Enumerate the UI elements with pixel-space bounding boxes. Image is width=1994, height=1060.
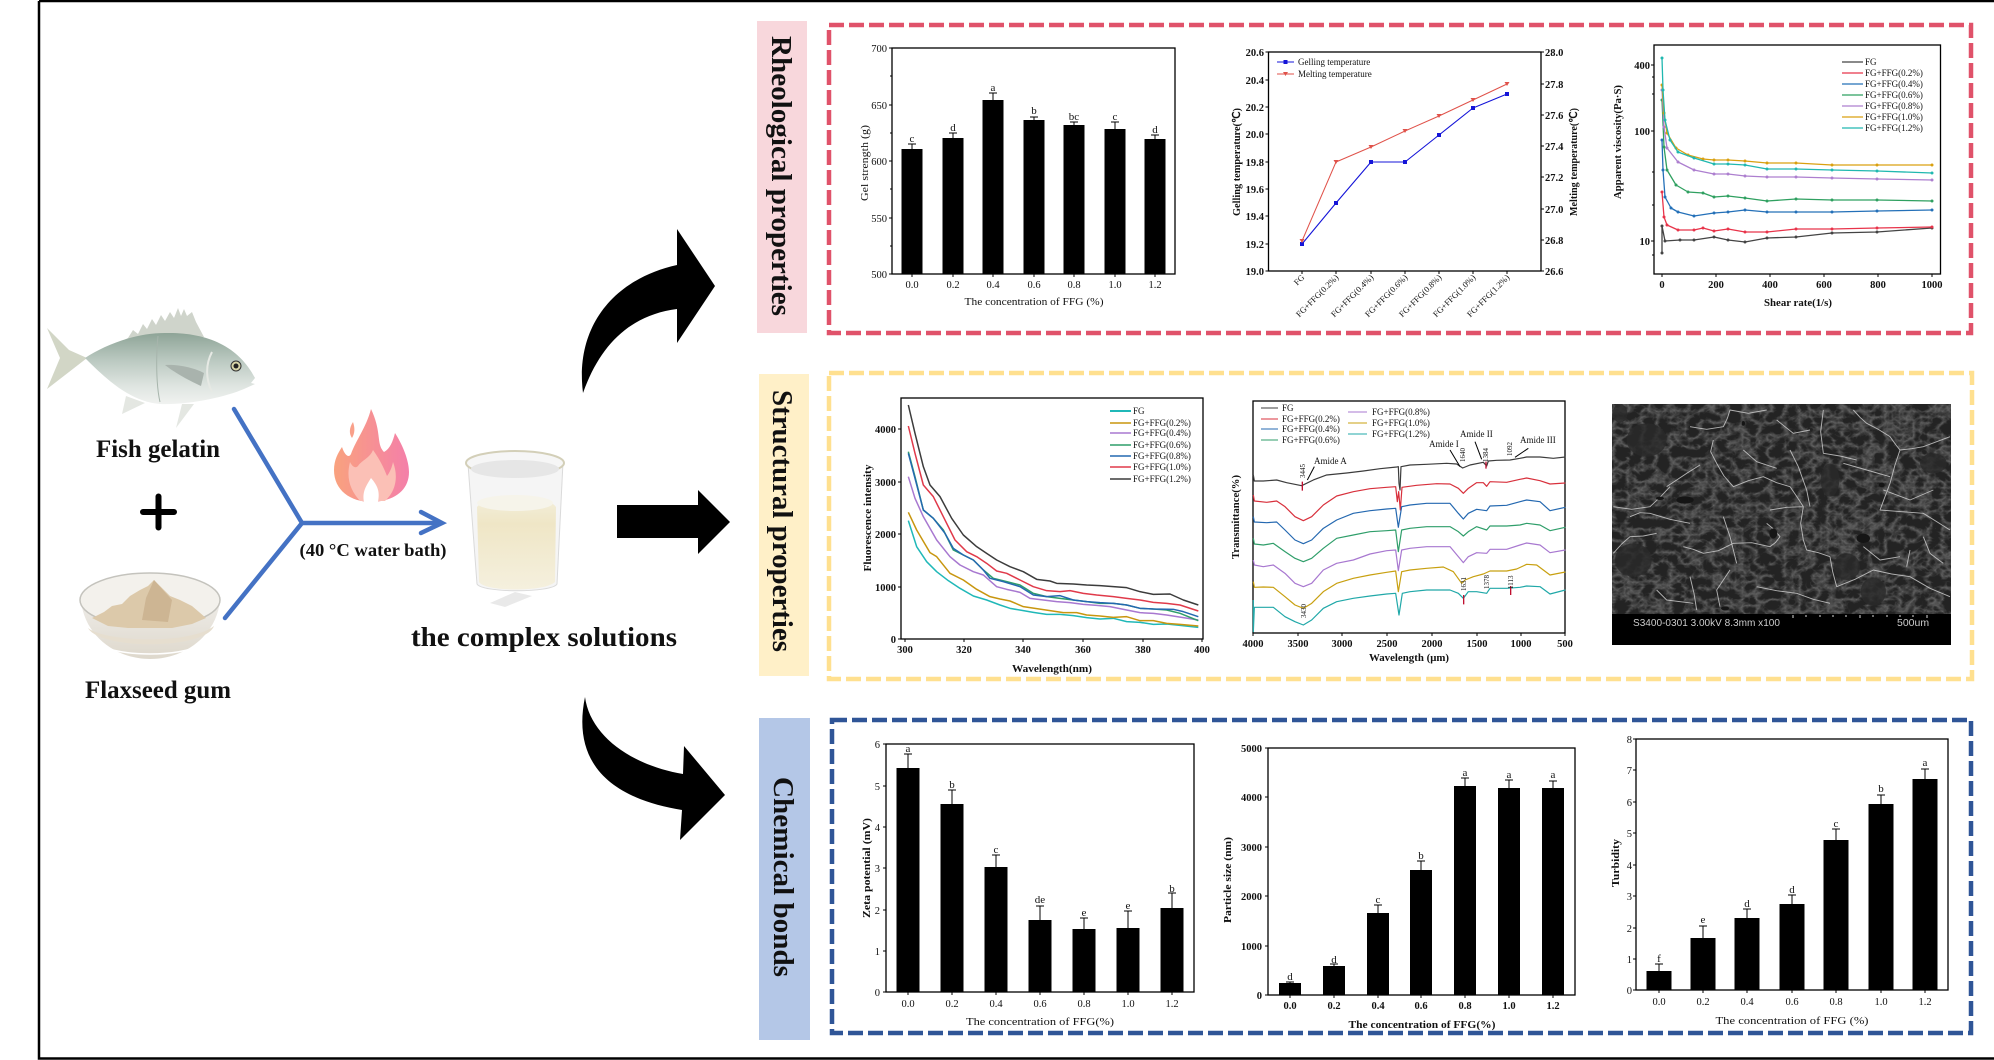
- line chart: FTIR transmittance: 1113: [1507, 575, 1515, 589]
- bar chart: gel strength: b: [1031, 105, 1037, 117]
- line chart: FTIR transmittance: 3445: [1299, 464, 1307, 478]
- line chart: fluorescence intensity: FG+FFG(0.4%): [1133, 428, 1191, 438]
- line chart: gelling and melting temperature: 20.2: [1246, 103, 1264, 114]
- line chart: FTIR transmittance: FG+FFG(1.0%): [1372, 418, 1430, 428]
- icon: plus: [143, 496, 174, 528]
- line chart: FTIR transmittance: Amide II: [1460, 429, 1493, 439]
- line chart: apparent viscosity: [1612, 45, 1942, 309]
- line chart: fluorescence intensity: [862, 398, 1210, 675]
- line chart: FTIR transmittance: 1640: [1459, 448, 1467, 462]
- line chart: apparent viscosity: FG+FFG(0.4%): [1865, 79, 1923, 89]
- line chart: fluorescence intensity: FG+FFG(0.8%): [1133, 451, 1191, 461]
- bar chart: turbidity: 0.4: [1740, 997, 1754, 1008]
- line chart: fluorescence intensity: 3000: [875, 478, 896, 489]
- icon: fish: [47, 308, 255, 428]
- bar chart: gel strength: 700: [871, 44, 887, 55]
- bar chart: zeta potential: Zeta potential (mV): [861, 818, 873, 918]
- arrow: combine ingredients: [225, 409, 442, 618]
- bar chart: turbidity: d: [1744, 898, 1750, 910]
- bar chart: particle size: c: [1376, 894, 1381, 906]
- panel label: Rheological properties: Rheological properties: [765, 36, 797, 316]
- bar chart: turbidity: b: [1878, 783, 1884, 795]
- bar chart: particle size: a: [1507, 769, 1512, 781]
- line chart: gelling and melting temperature: [1231, 48, 1580, 319]
- bar chart: particle size: 0.2: [1327, 1001, 1341, 1012]
- line chart: apparent viscosity: FG+FFG(1.2%): [1865, 123, 1923, 133]
- bar chart: particle size: The concentration of FFG(%): [1348, 1019, 1496, 1031]
- panel: rheological charts frame: [829, 25, 1971, 333]
- bar chart: zeta potential: 1.0: [1121, 999, 1135, 1010]
- line chart: apparent viscosity: 1000: [1922, 280, 1942, 291]
- bar chart: gel strength: 1.2: [1148, 280, 1162, 291]
- line chart: fluorescence intensity: 0: [891, 635, 896, 646]
- bar chart: zeta potential: 4: [875, 823, 881, 834]
- line chart: gelling and melting temperature: 19.2: [1246, 240, 1264, 251]
- line chart: gelling and melting temperature: 20.6: [1246, 48, 1264, 59]
- bar chart: turbidity: 1: [1627, 955, 1632, 966]
- arrow: to rheological properties: [582, 229, 715, 393]
- line chart: FTIR transmittance: FG+FFG(0.4%): [1282, 424, 1340, 434]
- line chart: FTIR transmittance: Amide I: [1429, 439, 1459, 449]
- bar chart: turbidity: 2: [1627, 924, 1632, 935]
- bar chart: gel strength: 0.6: [1027, 280, 1041, 291]
- bar chart: turbidity: a: [1923, 757, 1928, 769]
- bar chart: particle size: 1.0: [1502, 1001, 1516, 1012]
- line chart: gelling and melting temperature: 19.0: [1246, 267, 1264, 278]
- bar chart: zeta potential: The concentration of FFG(%): [966, 1016, 1114, 1028]
- icon: flame: [334, 409, 409, 502]
- bar chart: gel strength: c: [1113, 111, 1118, 123]
- line chart: gelling and melting temperature: 19.6: [1246, 185, 1264, 196]
- bar chart: gel strength: 1.0: [1108, 280, 1122, 291]
- line chart: apparent viscosity: FG: [1865, 57, 1877, 67]
- line chart: fluorescence intensity: 380: [1135, 645, 1151, 656]
- bar chart: zeta potential: [861, 740, 1194, 1028]
- panel label: Chemical bonds: Chemical bonds: [767, 777, 799, 977]
- bar chart: turbidity: 1.0: [1874, 997, 1888, 1008]
- line chart: gelling and melting temperature: 27.4: [1545, 142, 1564, 153]
- panel: structural charts frame: [829, 373, 1972, 679]
- bar chart: zeta potential: e: [1082, 907, 1087, 919]
- line chart: apparent viscosity: FG+FFG(0.8%): [1865, 101, 1923, 111]
- line chart: apparent viscosity: 200: [1708, 280, 1724, 291]
- line chart: apparent viscosity: FG+FFG(0.6%): [1865, 90, 1923, 100]
- bar chart: turbidity: 8: [1627, 735, 1632, 746]
- bar chart: particle size: b: [1418, 850, 1424, 862]
- line chart: fluorescence intensity: FG+FFG(1.2%): [1133, 474, 1191, 484]
- bar chart: particle size: 0.0: [1283, 1001, 1297, 1012]
- line chart: FTIR transmittance: 2500: [1376, 639, 1398, 650]
- line chart: fluorescence intensity: 1000: [875, 583, 896, 594]
- line chart: FTIR transmittance: 1631: [1460, 576, 1468, 591]
- bar chart: turbidity: The concentration of FFG (%): [1716, 1015, 1869, 1027]
- line chart: FTIR transmittance: FG+FFG(0.2%): [1282, 414, 1340, 424]
- line chart: gelling and melting temperature: FG+FFG(0.2%): [1294, 272, 1341, 319]
- line chart: FTIR transmittance: 1378: [1483, 574, 1491, 589]
- bar chart: gel strength: 0.2: [946, 280, 960, 291]
- bar chart: zeta potential: 0.0: [901, 999, 915, 1010]
- line chart: fluorescence intensity: 2000: [875, 530, 896, 541]
- bar chart: zeta potential: 3: [875, 864, 880, 875]
- line chart: apparent viscosity: FG+FFG(0.2%): [1865, 68, 1923, 78]
- line chart: FTIR transmittance: [1230, 401, 1573, 664]
- bar chart: particle size: a: [1551, 769, 1556, 781]
- bar chart: zeta potential: 1.2: [1165, 999, 1179, 1010]
- line chart: FTIR transmittance: Wavelength (μm): [1369, 652, 1449, 664]
- line chart: gelling and melting temperature: 19.4: [1246, 212, 1265, 223]
- bar chart: particle size: Particle size (nm): [1222, 837, 1234, 923]
- bar chart: gel strength: d: [1152, 124, 1158, 136]
- icon: bowl of flaxseed gum: [80, 573, 220, 659]
- bar chart: turbidity: 0.0: [1652, 997, 1666, 1008]
- bar chart: particle size: a: [1463, 767, 1468, 779]
- line chart: fluorescence intensity: Wavelength(nm): [1012, 663, 1092, 675]
- panel: chemical charts frame: [832, 720, 1971, 1033]
- bar chart: particle size: 4000: [1241, 793, 1262, 804]
- line chart: gelling and melting temperature: 27.2: [1545, 173, 1563, 184]
- line chart: gelling and melting temperature: Melting temperature(℃): [1568, 108, 1580, 216]
- bar chart: gel strength: [859, 44, 1175, 308]
- line chart: FTIR transmittance: 4000: [1242, 639, 1264, 650]
- bar chart: gel strength: c: [910, 133, 915, 145]
- line chart: gelling and melting temperature: 27.8: [1545, 80, 1563, 91]
- bar chart: particle size: 1000: [1241, 942, 1262, 953]
- arrow: to chemical bonds: [582, 697, 725, 840]
- line chart: FTIR transmittance: 2000: [1422, 639, 1442, 650]
- line chart: gelling and melting temperature: Gelling temperature(℃): [1231, 108, 1243, 216]
- line chart: gelling and melting temperature: FG+FFG(0.6%): [1363, 272, 1410, 319]
- heading: Fish gelatin: Fish gelatin: [96, 436, 220, 463]
- bar chart: particle size: 0.4: [1371, 1001, 1385, 1012]
- line chart: gelling and melting temperature: FG+FFG(0.4%): [1329, 272, 1376, 319]
- bar chart: zeta potential: c: [994, 844, 999, 856]
- line chart: FTIR transmittance: FG+FFG(1.2%): [1372, 429, 1430, 439]
- line chart: FTIR transmittance: 3000: [1332, 639, 1352, 650]
- line chart: FTIR transmittance: Amide III: [1520, 435, 1556, 445]
- bar chart: zeta potential: 5: [875, 782, 880, 793]
- line chart: apparent viscosity: Shear rate(1/s): [1764, 297, 1832, 309]
- line chart: apparent viscosity: FG+FFG(1.0%): [1865, 112, 1923, 122]
- arrow: to structural properties: [617, 490, 730, 554]
- bar chart: turbidity: f: [1657, 953, 1661, 965]
- bar chart: zeta potential: 2: [875, 906, 880, 917]
- line chart: fluorescence intensity: 4000: [875, 425, 896, 436]
- line chart: fluorescence intensity: 400: [1194, 645, 1210, 656]
- line chart: FTIR transmittance: 1500: [1466, 639, 1488, 650]
- bar chart: gel strength: 0.8: [1067, 280, 1081, 291]
- bar chart: zeta potential: b: [1169, 883, 1175, 895]
- bar chart: turbidity: [1610, 735, 1948, 1027]
- panel label: Rheological properties: [757, 21, 807, 333]
- bar chart: zeta potential: b: [949, 779, 955, 791]
- line chart: gelling and melting temperature: 26.8: [1545, 236, 1563, 247]
- line chart: apparent viscosity: 400: [1762, 280, 1778, 291]
- bar chart: particle size: d: [1287, 971, 1293, 983]
- line chart: gelling and melting temperature: 28.0: [1545, 48, 1563, 59]
- line chart: apparent viscosity: 0: [1659, 280, 1665, 291]
- line chart: FTIR transmittance: 1092: [1506, 442, 1514, 456]
- line chart: fluorescence intensity: 360: [1075, 645, 1091, 656]
- line chart: gelling and melting temperature: FG+FFG(1.2%): [1465, 272, 1512, 319]
- SEM micrograph: 500um: [1897, 617, 1929, 629]
- bar chart: particle size: 0.6: [1414, 1001, 1428, 1012]
- bar chart: zeta potential: 0.4: [989, 999, 1003, 1010]
- bar chart: particle size: 0.8: [1458, 1001, 1472, 1012]
- line chart: fluorescence intensity: FG+FFG(0.6%): [1133, 440, 1191, 450]
- line chart: gelling and melting temperature: FG+FFG(0.8%): [1397, 272, 1444, 319]
- bar chart: turbidity: 6: [1627, 798, 1632, 809]
- line chart: gelling and melting temperature: Gelling temperature: [1298, 57, 1370, 67]
- SEM micrograph: [1612, 404, 1951, 645]
- line chart: FTIR transmittance: Transmittance(%): [1230, 475, 1242, 559]
- bar chart: particle size: 3000: [1241, 843, 1262, 854]
- bar chart: gel strength: 0.4: [986, 280, 1000, 291]
- line chart: apparent viscosity: 10: [1640, 237, 1650, 248]
- bar chart: turbidity: 7: [1627, 766, 1632, 777]
- bar chart: zeta potential: e: [1126, 900, 1131, 912]
- heading: Flaxseed gum: Flaxseed gum: [85, 677, 231, 704]
- bar chart: turbidity: e: [1701, 914, 1706, 926]
- bar chart: gel strength: 650: [871, 101, 887, 112]
- line chart: fluorescence intensity: 300: [897, 645, 913, 656]
- bar chart: particle size: 5000: [1241, 744, 1262, 755]
- line chart: gelling and melting temperature: 27.0: [1545, 205, 1563, 216]
- bar chart: particle size: 1.2: [1546, 1001, 1560, 1012]
- label: water bath: (40 °C water bath): [300, 540, 446, 561]
- line chart: FTIR transmittance: FG+FFG(0.6%): [1282, 435, 1340, 445]
- bar chart: gel strength: d: [950, 122, 956, 134]
- bar chart: particle size: 2000: [1241, 892, 1262, 903]
- bar chart: turbidity: 1.2: [1918, 997, 1932, 1008]
- SEM micrograph: S3400-0301 3.00kV 8.3mm x100: [1633, 617, 1780, 629]
- bar chart: turbidity: 4: [1627, 861, 1633, 872]
- heading: the complex solutions: the complex solutions: [411, 622, 677, 652]
- bar chart: turbidity: d: [1789, 884, 1795, 896]
- line chart: gelling and melting temperature: FG+FFG(1.0%): [1431, 272, 1478, 319]
- line chart: gelling and melting temperature: FG: [1292, 272, 1306, 287]
- line chart: apparent viscosity: 800: [1870, 280, 1886, 291]
- bar chart: gel strength: The concentration of FFG (%): [964, 296, 1104, 308]
- line chart: gelling and melting temperature: 20.0: [1246, 130, 1264, 141]
- bar chart: gel strength: 600: [871, 157, 887, 168]
- bar chart: turbidity: c: [1834, 818, 1839, 830]
- bar chart: zeta potential: 6: [875, 740, 880, 751]
- line chart: FTIR transmittance: FG+FFG(0.8%): [1372, 407, 1430, 417]
- line chart: fluorescence intensity: Fluorescence intensity: [862, 464, 874, 572]
- line chart: fluorescence intensity: 340: [1015, 645, 1031, 656]
- bar chart: zeta potential: 0.2: [945, 999, 959, 1010]
- panel label: Structural properties: Structural properties: [766, 390, 798, 652]
- bar chart: zeta potential: 0.6: [1033, 999, 1047, 1010]
- line chart: FTIR transmittance: Amide A: [1314, 456, 1347, 466]
- bar chart: turbidity: 0.6: [1785, 997, 1799, 1008]
- bar chart: zeta potential: 0: [875, 988, 880, 999]
- line chart: gelling and melting temperature: 26.6: [1545, 267, 1563, 278]
- bar chart: turbidity: Turbidity: [1610, 838, 1622, 887]
- line chart: fluorescence intensity: FG: [1133, 406, 1145, 416]
- bar chart: turbidity: 0.2: [1696, 997, 1710, 1008]
- panel label: Structural properties: [759, 374, 809, 676]
- bar chart: zeta potential: de: [1035, 894, 1045, 906]
- line chart: gelling and melting temperature: 20.4: [1246, 76, 1265, 87]
- panel label: Chemical bonds: [759, 718, 810, 1040]
- line chart: apparent viscosity: Apparent viscosity(Pa·S): [1612, 85, 1624, 199]
- bar chart: particle size: [1222, 744, 1575, 1031]
- line chart: gelling and melting temperature: Melting temperature: [1298, 69, 1372, 79]
- line chart: FTIR transmittance: 500: [1557, 639, 1573, 650]
- line chart: apparent viscosity: 400: [1634, 61, 1650, 72]
- line chart: fluorescence intensity: 320: [956, 645, 972, 656]
- line chart: FTIR transmittance: 3500: [1288, 639, 1308, 650]
- line chart: apparent viscosity: 100: [1634, 127, 1650, 138]
- bar chart: gel strength: a: [991, 82, 996, 94]
- line chart: fluorescence intensity: FG+FFG(0.2%): [1133, 418, 1191, 428]
- bar chart: particle size: d: [1331, 954, 1337, 966]
- bar chart: gel strength: bc: [1069, 111, 1079, 123]
- bar chart: turbidity: 5: [1627, 829, 1632, 840]
- bar chart: turbidity: 0: [1627, 986, 1632, 997]
- bar chart: particle size: 0: [1257, 991, 1262, 1002]
- bar chart: gel strength: 550: [871, 214, 887, 225]
- bar chart: gel strength: 0.0: [905, 280, 919, 291]
- line chart: FTIR transmittance: 3430: [1300, 604, 1308, 618]
- line chart: gelling and melting temperature: 19.8: [1246, 158, 1264, 169]
- bar chart: zeta potential: 1: [875, 947, 880, 958]
- line chart: FTIR transmittance: 1000: [1510, 639, 1532, 650]
- bar chart: gel strength: 500: [871, 270, 887, 281]
- line chart: apparent viscosity: 600: [1816, 280, 1832, 291]
- bar chart: turbidity: 0.8: [1829, 997, 1843, 1008]
- icon: beaker with solution: [466, 451, 564, 607]
- bar chart: zeta potential: a: [906, 743, 911, 755]
- line chart: fluorescence intensity: FG+FFG(1.0%): [1133, 462, 1191, 472]
- bar chart: gel strength: Gel strength (g): [859, 125, 871, 201]
- line chart: FTIR transmittance: FG: [1282, 403, 1294, 413]
- bar chart: turbidity: 3: [1627, 892, 1632, 903]
- line chart: FTIR transmittance: 1384: [1482, 448, 1490, 462]
- bar chart: zeta potential: 0.8: [1077, 999, 1091, 1010]
- line chart: gelling and melting temperature: 27.6: [1545, 111, 1563, 122]
